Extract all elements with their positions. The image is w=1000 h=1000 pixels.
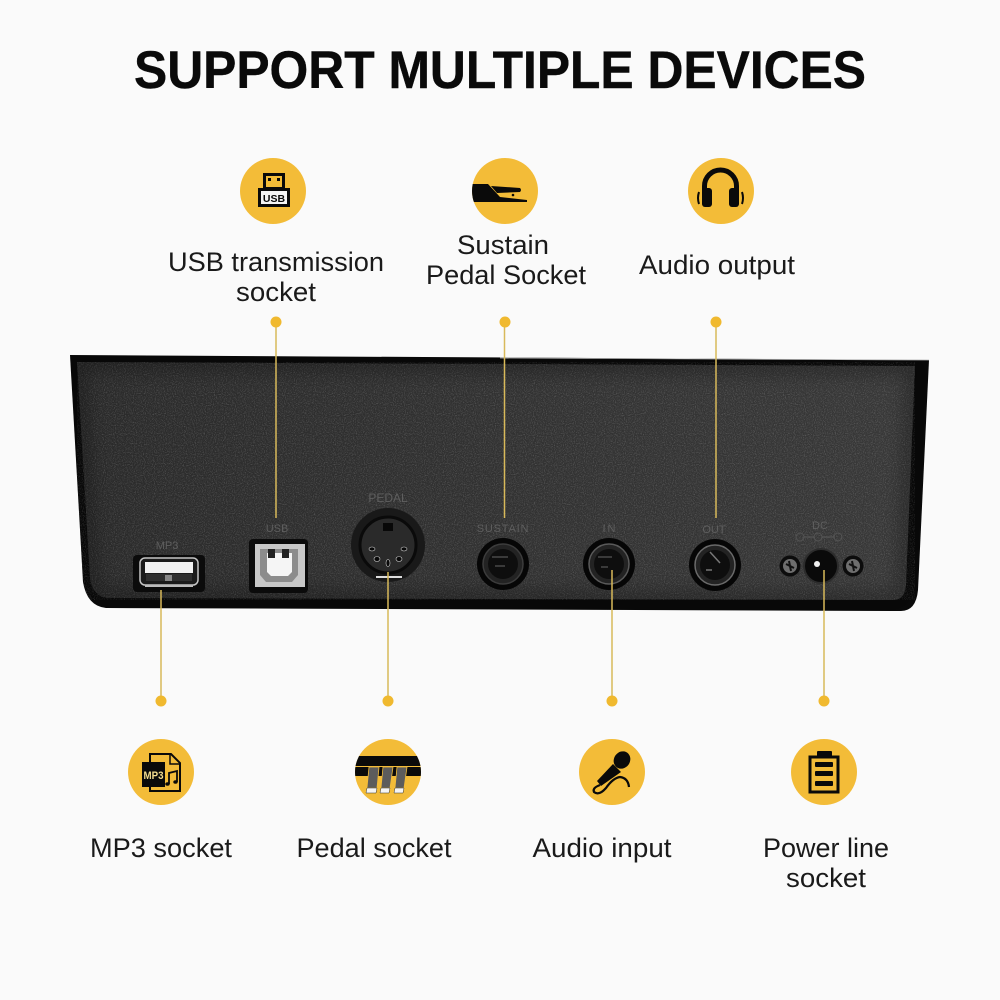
port: SUSTAIN bbox=[477, 523, 529, 590]
icon: MP3 file bbox=[128, 739, 194, 805]
label: MP3 socket: MP3 socket bbox=[90, 833, 232, 863]
panel: keyboard rear bbox=[70, 355, 929, 611]
port: DC bbox=[780, 520, 864, 583]
port: OUT: OUT bbox=[702, 524, 726, 536]
connector: sustain bbox=[500, 316, 510, 518]
label: Sustain Pedal Socket: Sustain bbox=[457, 230, 549, 260]
port: SUSTAIN: SUSTAIN bbox=[477, 523, 529, 535]
icon: sustain pedal bbox=[470, 158, 538, 224]
icon: USB: USB bbox=[263, 193, 286, 205]
connector: pedal bbox=[382, 572, 394, 706]
label: Audio output: Audio output bbox=[639, 250, 796, 280]
port: PEDAL bbox=[351, 491, 425, 582]
connector: USB bbox=[270, 316, 282, 518]
icon: microphone bbox=[579, 739, 645, 805]
icon: headphones bbox=[688, 158, 754, 224]
icon: piano pedals bbox=[355, 739, 421, 805]
icon: USB bbox=[240, 158, 306, 224]
connector: audio input bbox=[606, 570, 618, 706]
label: Sustain Pedal Socket: Pedal Socket bbox=[426, 260, 586, 290]
connector: MP3 bbox=[156, 590, 166, 706]
port: USB: USB bbox=[266, 523, 288, 535]
label: Pedal socket: Pedal socket bbox=[296, 833, 452, 863]
icon: battery bbox=[791, 739, 857, 805]
label: Sustain Pedal Socket bbox=[426, 230, 586, 290]
label: Power line socket: socket bbox=[786, 863, 866, 893]
port: IN bbox=[583, 523, 635, 590]
label: USB transmission socket bbox=[168, 247, 384, 307]
port: MP3 bbox=[133, 540, 205, 592]
port: MP3: MP3 bbox=[156, 540, 178, 552]
label: USB transmission socket: USB transmission bbox=[168, 247, 384, 277]
label: USB transmission socket: socket bbox=[236, 277, 316, 307]
label: Power line socket bbox=[763, 833, 889, 893]
port: PEDAL: PEDAL bbox=[368, 491, 408, 505]
label: Power line socket: Power line bbox=[763, 833, 889, 863]
port: USB bbox=[249, 523, 308, 593]
icon: MP3 file: MP3 bbox=[144, 770, 164, 782]
port: IN: IN bbox=[602, 523, 618, 535]
connector: power bbox=[818, 570, 830, 706]
connector: audio output bbox=[710, 316, 722, 518]
port: DC: DC bbox=[812, 520, 828, 532]
label: Audio input: Audio input bbox=[532, 833, 672, 863]
title: SUPPORT MULTIPLE DEVICES bbox=[134, 41, 866, 100]
port: OUT bbox=[689, 524, 741, 591]
